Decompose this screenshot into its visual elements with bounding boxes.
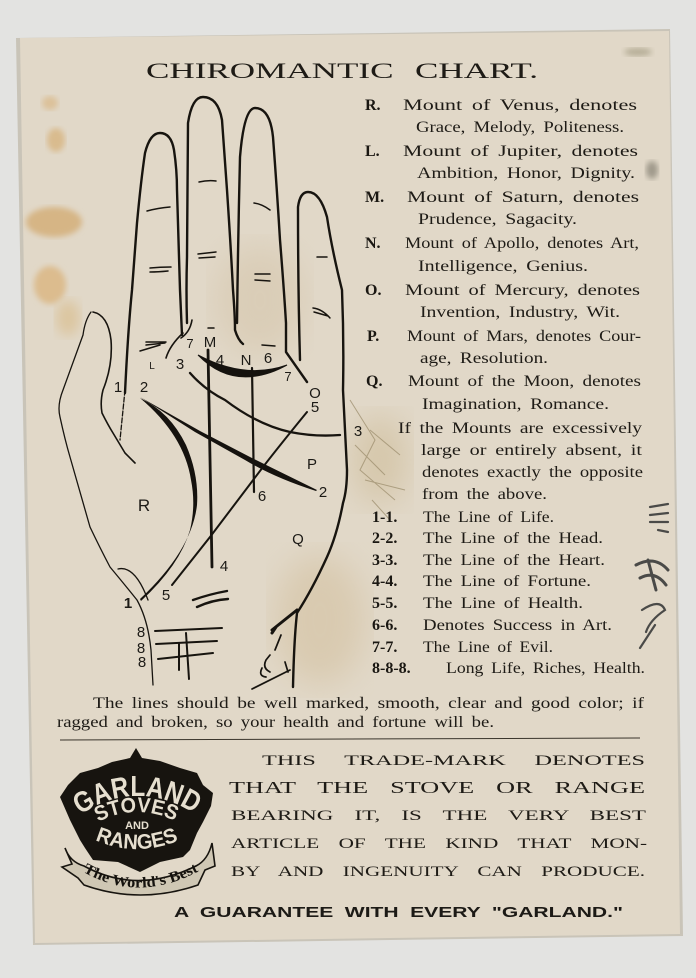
lines legend: 5-5.: [372, 595, 397, 612]
brand lettering: GARLAND: [74, 776, 200, 812]
mounts legend: [365, 97, 641, 413]
legend O: O.: [365, 282, 381, 299]
legend N: N.: [365, 235, 381, 252]
lines legend: 4-4.: [372, 573, 397, 590]
legend R: Mount of Venus, denotes: [403, 97, 637, 114]
legend R: R.: [365, 97, 381, 114]
closing note: The lines should be well marked, smooth, clear and good color; if: [93, 695, 645, 712]
legend M: Mount of Saturn, denotes: [407, 189, 639, 206]
legend L: Ambition, Honor, Dignity.: [417, 165, 635, 182]
legend L: Mount of Jupiter, denotes: [403, 143, 638, 160]
hand labels: R: [138, 496, 150, 515]
hand labels: 5: [311, 399, 319, 416]
hand labels: 6: [258, 488, 266, 505]
trademark statement: THAT THE STOVE OR RANGE: [229, 778, 645, 797]
trademark statement: [229, 753, 647, 880]
legend M: M.: [365, 189, 384, 206]
hand labels: Q: [292, 531, 304, 548]
lines legend: The Line of Life.: [423, 509, 554, 526]
legend P: Mount of Mars, denotes Cour-: [407, 328, 641, 345]
life line: [140, 398, 197, 601]
heart line: [190, 373, 340, 436]
trademark statement: ARTICLE OF THE KIND THAT MON-: [231, 836, 647, 852]
lines legend: 7-7.: [372, 639, 397, 656]
handwritten margin marks: [636, 504, 668, 648]
hand diagram: [59, 97, 362, 689]
note on the mounts: If the Mounts are excessively: [398, 420, 642, 437]
hand labels: 4: [216, 352, 224, 369]
finger creases: [140, 181, 330, 351]
hand labels: 8: [137, 624, 145, 641]
hand labels: N: [241, 352, 251, 369]
slogan: The World's Best: [84, 863, 198, 888]
legend O: Mount of Mercury, denotes: [405, 282, 640, 299]
hand labels: 3: [176, 356, 184, 373]
brand lettering: RANGES: [96, 827, 177, 850]
lines legend: The Line of Health.: [423, 595, 583, 612]
legend L: L.: [365, 143, 380, 160]
lines legend: The Line of the Heart.: [423, 552, 605, 569]
trademark statement: THIS TRADE-MARK DENOTES: [262, 753, 645, 769]
Apollo line: [252, 368, 254, 492]
legend P: [367, 328, 641, 367]
closing note: [57, 695, 645, 731]
hand labels: 7: [284, 369, 292, 384]
trademark statement: BY AND INGENUITY CAN PRODUCE.: [231, 864, 645, 880]
hand outline: [59, 97, 347, 687]
brand lettering: STOVES: [94, 797, 178, 820]
legend Q: [366, 373, 641, 413]
hand labels: 5: [162, 587, 170, 604]
legend M: Prudence, Sagacity.: [418, 211, 577, 228]
title: CHIROMANTIC CHART.: [146, 58, 538, 83]
fortune line: [208, 350, 212, 567]
lines legend: 1-1.: [372, 509, 397, 526]
hand labels: M: [204, 334, 216, 351]
lines legend: [372, 509, 645, 677]
legend M: [365, 189, 639, 228]
brand lettering: [74, 776, 200, 850]
hand labels: 8: [137, 640, 145, 657]
wrist bracelets and marks: [155, 591, 297, 689]
lines legend: Denotes Success in Art.: [423, 617, 612, 634]
legend O: [365, 282, 640, 321]
lines legend: The Line of Evil.: [423, 639, 553, 656]
hand labels: 4: [220, 558, 228, 575]
hand labels: 6: [264, 350, 272, 367]
lines legend: 6-6.: [372, 617, 397, 634]
legend N: Mount of Apollo, denotes Art,: [405, 235, 639, 252]
legend N: [365, 235, 639, 275]
hand labels: 7: [186, 336, 194, 351]
hand labels: 2: [319, 484, 327, 501]
note on the mounts: denotes exactly the opposite: [422, 464, 643, 481]
lines legend: 8-8-8.: [372, 660, 411, 677]
legend Q: Mount of the Moon, denotes: [408, 373, 641, 390]
head line: [140, 397, 317, 491]
hand labels: 8: [138, 654, 146, 671]
trademark statement: BEARING IT, IS THE VERY BEST: [231, 808, 646, 824]
legend P: age, Resolution.: [420, 350, 548, 367]
girdle curve: [198, 355, 287, 377]
hand labels: L: [149, 361, 155, 372]
note on the mounts: [398, 420, 643, 503]
hand labels: 3: [354, 423, 362, 440]
hand labels: 2: [140, 379, 148, 396]
health line: [172, 412, 307, 585]
hand labels: P: [307, 456, 317, 473]
lines legend: 2-2.: [372, 530, 397, 547]
brand lettering: AND: [125, 820, 149, 832]
lines legend: 3-3.: [372, 552, 397, 569]
legend N: Intelligence, Genius.: [418, 258, 588, 275]
legend L: [365, 143, 638, 182]
legend R: Grace, Melody, Politeness.: [416, 119, 624, 136]
guarantee line: A GUARANTEE WITH EVERY "GARLAND.": [174, 904, 623, 921]
note on the mounts: from the above.: [422, 486, 547, 503]
lines legend: Long Life, Riches, Health.: [446, 660, 645, 677]
legend Q: Q.: [366, 373, 382, 390]
closing note: ragged and broken, so your health and fortune will be.: [57, 714, 494, 731]
legend P: P.: [367, 328, 379, 345]
shield: [60, 748, 213, 872]
lines legend: The Line of Fortune.: [423, 573, 591, 590]
legend R: [365, 97, 637, 136]
note on the mounts: large or entirely absent, it: [421, 442, 643, 459]
legend Q: Imagination, Romance.: [422, 396, 609, 413]
Garland logo: [60, 748, 216, 896]
lines legend: The Line of the Head.: [423, 530, 603, 547]
hand labels: 1: [124, 595, 132, 612]
ribbon: [62, 843, 215, 895]
paper stains: [26, 48, 658, 685]
legend O: Invention, Industry, Wit.: [420, 304, 620, 321]
hand labels: O: [309, 385, 321, 402]
hand labels: [114, 334, 362, 671]
hand labels: 1: [114, 379, 122, 396]
